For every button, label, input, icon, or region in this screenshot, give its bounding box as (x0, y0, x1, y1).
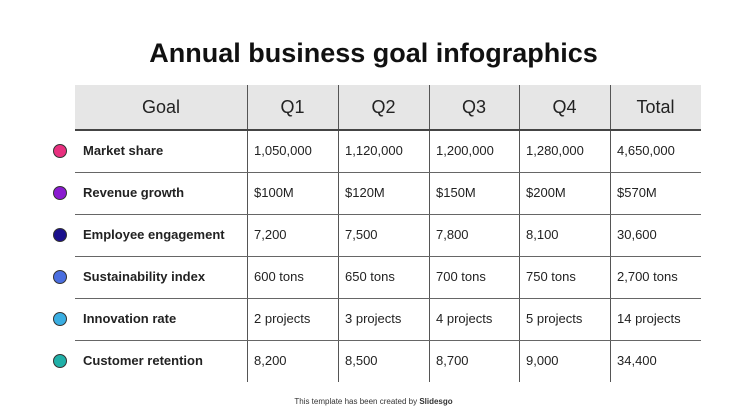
row: customer retention: 34,400 (617, 353, 657, 368)
row: sustainability index: 750 tons (526, 269, 576, 284)
row: market share: 1,280,000 (526, 143, 584, 158)
row: revenue growth: $120M (345, 185, 385, 200)
row: revenue growth: $150M (436, 185, 476, 200)
row: customer retention: Customer retention (83, 353, 203, 368)
row: market share: 1,120,000 (345, 143, 403, 158)
row: revenue growth: $570M (617, 185, 657, 200)
text: Q3 (462, 97, 486, 117)
row: innovation rate: 14 projects (617, 311, 681, 326)
row: market share: 1,050,000 (254, 143, 312, 158)
title: Annual business goal infographics (149, 38, 598, 68)
row: market share (53, 143, 675, 158)
table (75, 85, 701, 129)
row: sustainability index: 650 tons (345, 269, 395, 284)
row: customer retention (53, 353, 657, 368)
row: market share: 1,200,000 (436, 143, 494, 158)
row: employee engagement: 30,600 (617, 227, 657, 242)
row: customer retention: 8,500 (345, 353, 378, 368)
row: market share: 4,650,000 (617, 143, 675, 158)
row: sustainability index: Sustainability index (83, 269, 205, 284)
row: employee engagement: 7,800 (436, 227, 469, 242)
row: innovation rate: Innovation rate (83, 311, 176, 326)
row: market share: Market share (83, 143, 163, 158)
row: customer retention: 9,000 (526, 353, 559, 368)
row: innovation rate: 4 projects (436, 311, 492, 326)
text: Q1 (280, 97, 304, 117)
row: employee engagement: 7,500 (345, 227, 378, 242)
row: innovation rate: 5 projects (526, 311, 582, 326)
row: innovation rate (53, 311, 681, 326)
row: employee engagement: 7,200 (254, 227, 287, 242)
text: Total (636, 97, 675, 117)
row: revenue growth: $100M (254, 185, 294, 200)
row: employee engagement: Employee engagement (83, 227, 225, 242)
text: Goal (142, 97, 180, 117)
row: sustainability index: 2,700 tons (617, 269, 678, 284)
row: revenue growth: Revenue growth (83, 185, 184, 200)
row: employee engagement (53, 227, 657, 242)
row: customer retention: 8,200 (254, 353, 287, 368)
text: Q4 (552, 97, 576, 117)
footer: This template has been created by Slidesgo (294, 397, 453, 406)
row: innovation rate: 2 projects (254, 311, 310, 326)
row: customer retention: 8,700 (436, 353, 469, 368)
text: Q2 (371, 97, 396, 117)
row: employee engagement: 8,100 (526, 227, 559, 242)
row: sustainability index: 600 tons (254, 269, 304, 284)
header row (75, 85, 701, 130)
row: sustainability index: 700 tons (436, 269, 486, 284)
row: sustainability index (53, 269, 678, 284)
row: revenue growth: $200M (526, 185, 566, 200)
row: revenue growth (53, 185, 657, 200)
row: innovation rate: 3 projects (345, 311, 401, 326)
